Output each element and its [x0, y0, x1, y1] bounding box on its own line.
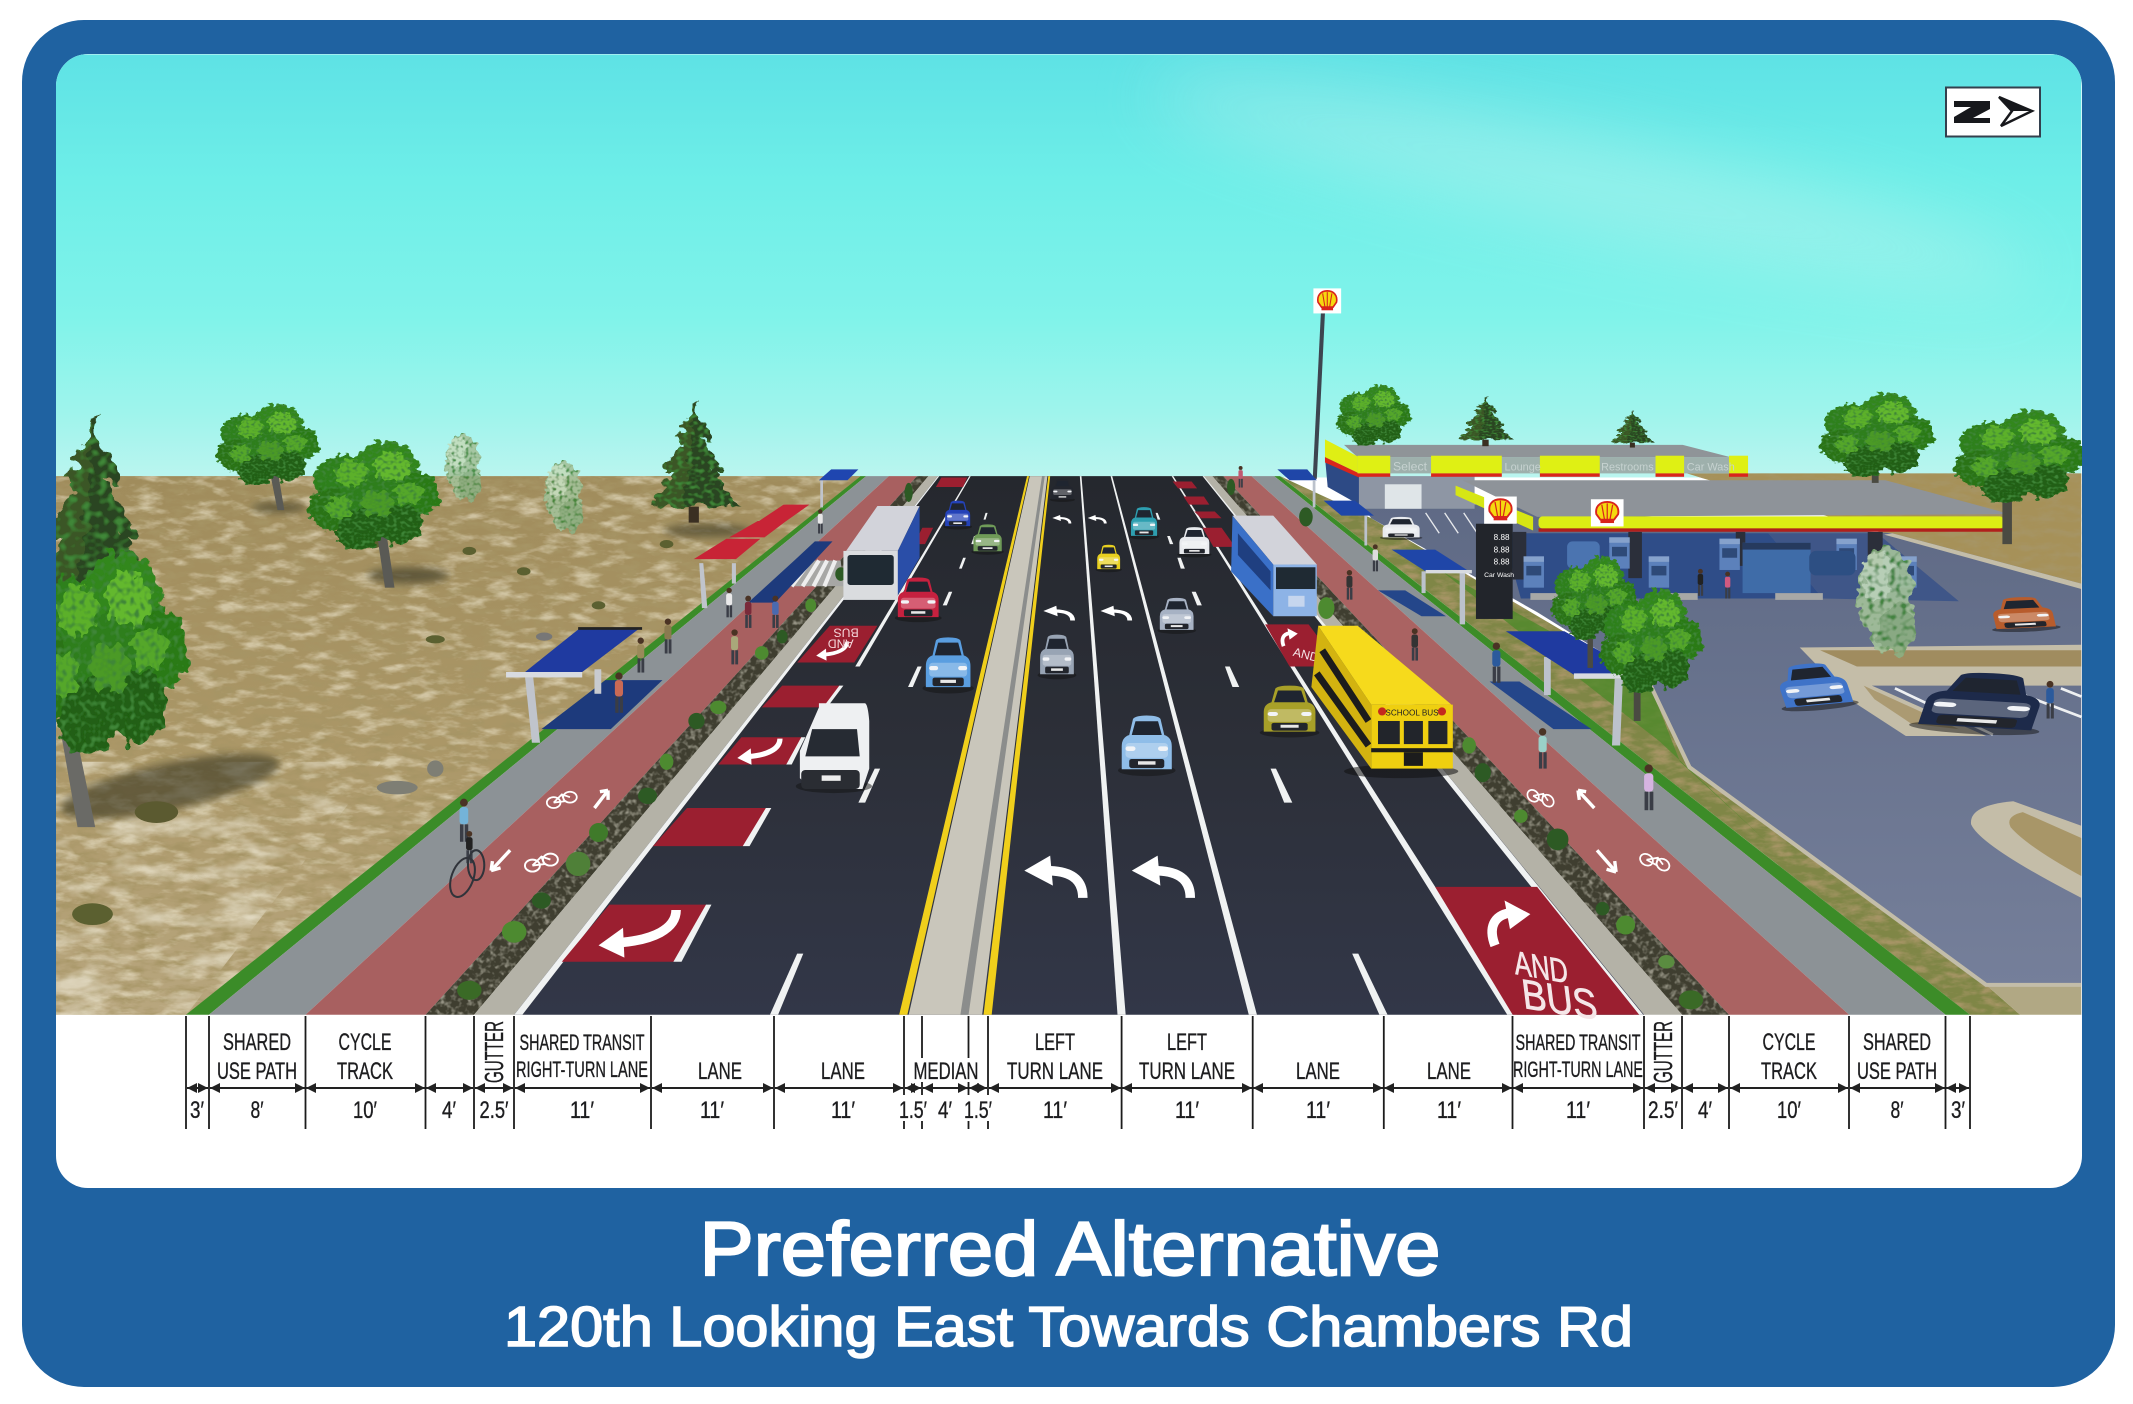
- right sidewalk and cycle track: [1203, 476, 2020, 1015]
- street rendering scene: [23, 45, 2086, 1029]
- vehicles in westbound lanes: [796, 501, 1004, 793]
- yellow school bus: [1311, 626, 1458, 778]
- shade shelters, right: [1277, 469, 1642, 745]
- dimension labels: SHARED: [1863, 1029, 1931, 1056]
- dimension labels: 4′: [1698, 1097, 1712, 1124]
- dimension labels: 11′: [831, 1097, 855, 1124]
- and-bus pavement text: BUS: [1519, 970, 1600, 1029]
- dimension labels: 11′: [700, 1097, 724, 1124]
- left turn arrows in center lanes: [1024, 515, 1190, 898]
- people and cyclists: [445, 466, 2054, 900]
- trees in front of station: [1551, 544, 1914, 721]
- dimension labels: LANE: [1296, 1058, 1340, 1085]
- white van: [796, 703, 872, 793]
- and-bus pavement text: [1515, 952, 1596, 1019]
- shelter: large blue: [506, 627, 662, 743]
- parking island, upper: [1800, 645, 2081, 736]
- gas station building: Car Wash: [1687, 462, 1735, 474]
- left side bus lane boxes: [562, 477, 967, 962]
- dimension labels: LANE: [1427, 1058, 1471, 1085]
- upside down and-bus marking, left: [828, 628, 858, 648]
- white coach bus: [843, 506, 920, 600]
- gas station building: Restrooms: [1601, 462, 1654, 474]
- blue and white transit bus: [1231, 516, 1317, 616]
- turn arrow, upper right: [1282, 628, 1298, 646]
- dimension labels: CYCLE: [1762, 1029, 1816, 1056]
- monument Shell sign with fuel prices: 8.88: [1494, 558, 1510, 567]
- shelter: middle blue: [1378, 550, 1472, 624]
- dimension labels: 2.5′: [480, 1097, 509, 1124]
- dimension labels: RIGHT-TURN LANE: [516, 1057, 648, 1082]
- vehicles in eastbound lanes: [1038, 479, 1458, 778]
- dimension arrows: [187, 1087, 1969, 1089]
- monument Shell sign with fuel prices: Car Wash: [1484, 572, 1514, 579]
- dimension labels: LEFT: [1035, 1029, 1075, 1056]
- road surface: [514, 476, 1644, 1015]
- dimension labels: LANE: [821, 1058, 865, 1085]
- tall Shell price sign: [1313, 288, 1341, 479]
- dimension labels: 11′: [1043, 1097, 1067, 1124]
- panel: white card with street rendering and dimension strip: [23, 45, 2086, 1188]
- dimension labels: 10′: [353, 1097, 377, 1124]
- and-bus pavement text: AND: [1512, 945, 1570, 992]
- dimension labels: LEFT: [1167, 1029, 1207, 1056]
- turn arrow, middle left: [737, 739, 780, 765]
- dimension labels: 8′: [250, 1097, 264, 1124]
- dry grass field, left: [56, 476, 861, 1015]
- dimension labels: 4′: [938, 1097, 952, 1124]
- crosswalk: [782, 560, 843, 586]
- upside down and-bus marking, left: BUS: [834, 625, 859, 639]
- gas station parking lot: [1360, 503, 2081, 1015]
- cyclist, foreground left: [445, 831, 484, 900]
- dimension labels: SHARED: [223, 1029, 291, 1056]
- subtitle: 120th Looking East Towards Chambers Rd: [504, 1295, 1633, 1359]
- dimension labels: 4′: [442, 1097, 456, 1124]
- dimension labels: SHARED TRANSIT: [520, 1030, 644, 1055]
- vehicles in gas station lot: [1380, 517, 2061, 738]
- dimension labels: MEDIAN: [914, 1058, 978, 1085]
- dimension labels: 11′: [1437, 1097, 1461, 1124]
- cycle track markings: [491, 783, 1672, 877]
- left sidewalk and cycle track: [186, 476, 938, 1015]
- dimension labels: 1.5′: [899, 1097, 927, 1124]
- shelter: small blue: [1324, 501, 1374, 545]
- title: Preferred Alternative: [700, 1207, 1440, 1292]
- parking island, lower: [1971, 801, 2081, 898]
- dimension labels: USE PATH: [217, 1058, 297, 1085]
- fuel canopy and pumps: [1456, 480, 2011, 601]
- dimension labels: TURN LANE: [1139, 1058, 1235, 1085]
- dimension labels: TURN LANE: [1007, 1058, 1103, 1085]
- dimension labels: 11′: [1306, 1097, 1330, 1124]
- dimension labels: RIGHT-TURN LANE: [1513, 1057, 1643, 1082]
- sky: [56, 45, 2081, 477]
- trees, left side: [23, 403, 738, 827]
- right side bus lane boxes: [1173, 482, 1639, 1029]
- gas station building: Lounge: [1505, 462, 1541, 474]
- shelter: small blue far: [819, 469, 858, 507]
- dimension labels: TRACK: [337, 1058, 393, 1085]
- upside down and-bus marking, left: AND: [828, 636, 854, 650]
- road markings: [514, 476, 1643, 1015]
- dimension strip: [186, 1016, 1970, 1129]
- gas station building: [1325, 439, 1748, 509]
- dimension labels: 3′: [1951, 1097, 1965, 1124]
- turn arrow, lower left: [599, 910, 676, 958]
- dimension labels: 11′: [1175, 1097, 1199, 1124]
- dimension labels: TRACK: [1761, 1058, 1817, 1085]
- dimension labels: 11′: [570, 1097, 594, 1124]
- dimension labels: 2.5′: [1648, 1097, 1678, 1124]
- dimension labels: 1.5′: [964, 1097, 992, 1124]
- turn arrow, upper left: [816, 642, 847, 661]
- and-bus pavement text, upper: AND: [1292, 645, 1320, 665]
- shelter: red row: [694, 505, 833, 608]
- dimension labels: USE PATH: [1857, 1058, 1937, 1085]
- north arrow: [1946, 88, 2040, 136]
- monument Shell sign with fuel prices: 8.88: [1494, 545, 1510, 554]
- turn arrow, lower right: [1492, 901, 1530, 945]
- shelter: far blue: [1277, 469, 1317, 507]
- dimension labels: GUTTER: [1648, 1021, 1678, 1083]
- gas station building: Select: [1393, 460, 1428, 474]
- dimension labels: LANE: [698, 1058, 742, 1085]
- shelter: large blue: [1490, 631, 1642, 745]
- shade shelters, left: [506, 469, 858, 743]
- yellow school bus: SCHOOL BUS: [1385, 709, 1439, 718]
- dimension labels: 8′: [1890, 1097, 1904, 1124]
- dimension labels: [190, 1021, 1965, 1124]
- monument Shell sign with fuel prices: [1476, 497, 1517, 619]
- median with double yellow lines: [899, 476, 1050, 1015]
- dimension labels: 10′: [1777, 1097, 1801, 1124]
- dimension labels: 11′: [1566, 1097, 1590, 1124]
- monument Shell sign with fuel prices: 8.88: [1494, 533, 1510, 542]
- dimension labels: GUTTER: [479, 1021, 509, 1083]
- planting strip, right: [1227, 479, 1703, 1009]
- planting strip, left: [457, 483, 913, 1000]
- dimension tick lines: [186, 1016, 1970, 1129]
- dimension labels: 3′: [190, 1097, 204, 1124]
- trees behind station: [1336, 385, 2086, 544]
- dimension labels: SHARED TRANSIT: [1516, 1030, 1640, 1055]
- dimension labels: CYCLE: [338, 1029, 392, 1056]
- dry grass field, right: [1687, 473, 2081, 588]
